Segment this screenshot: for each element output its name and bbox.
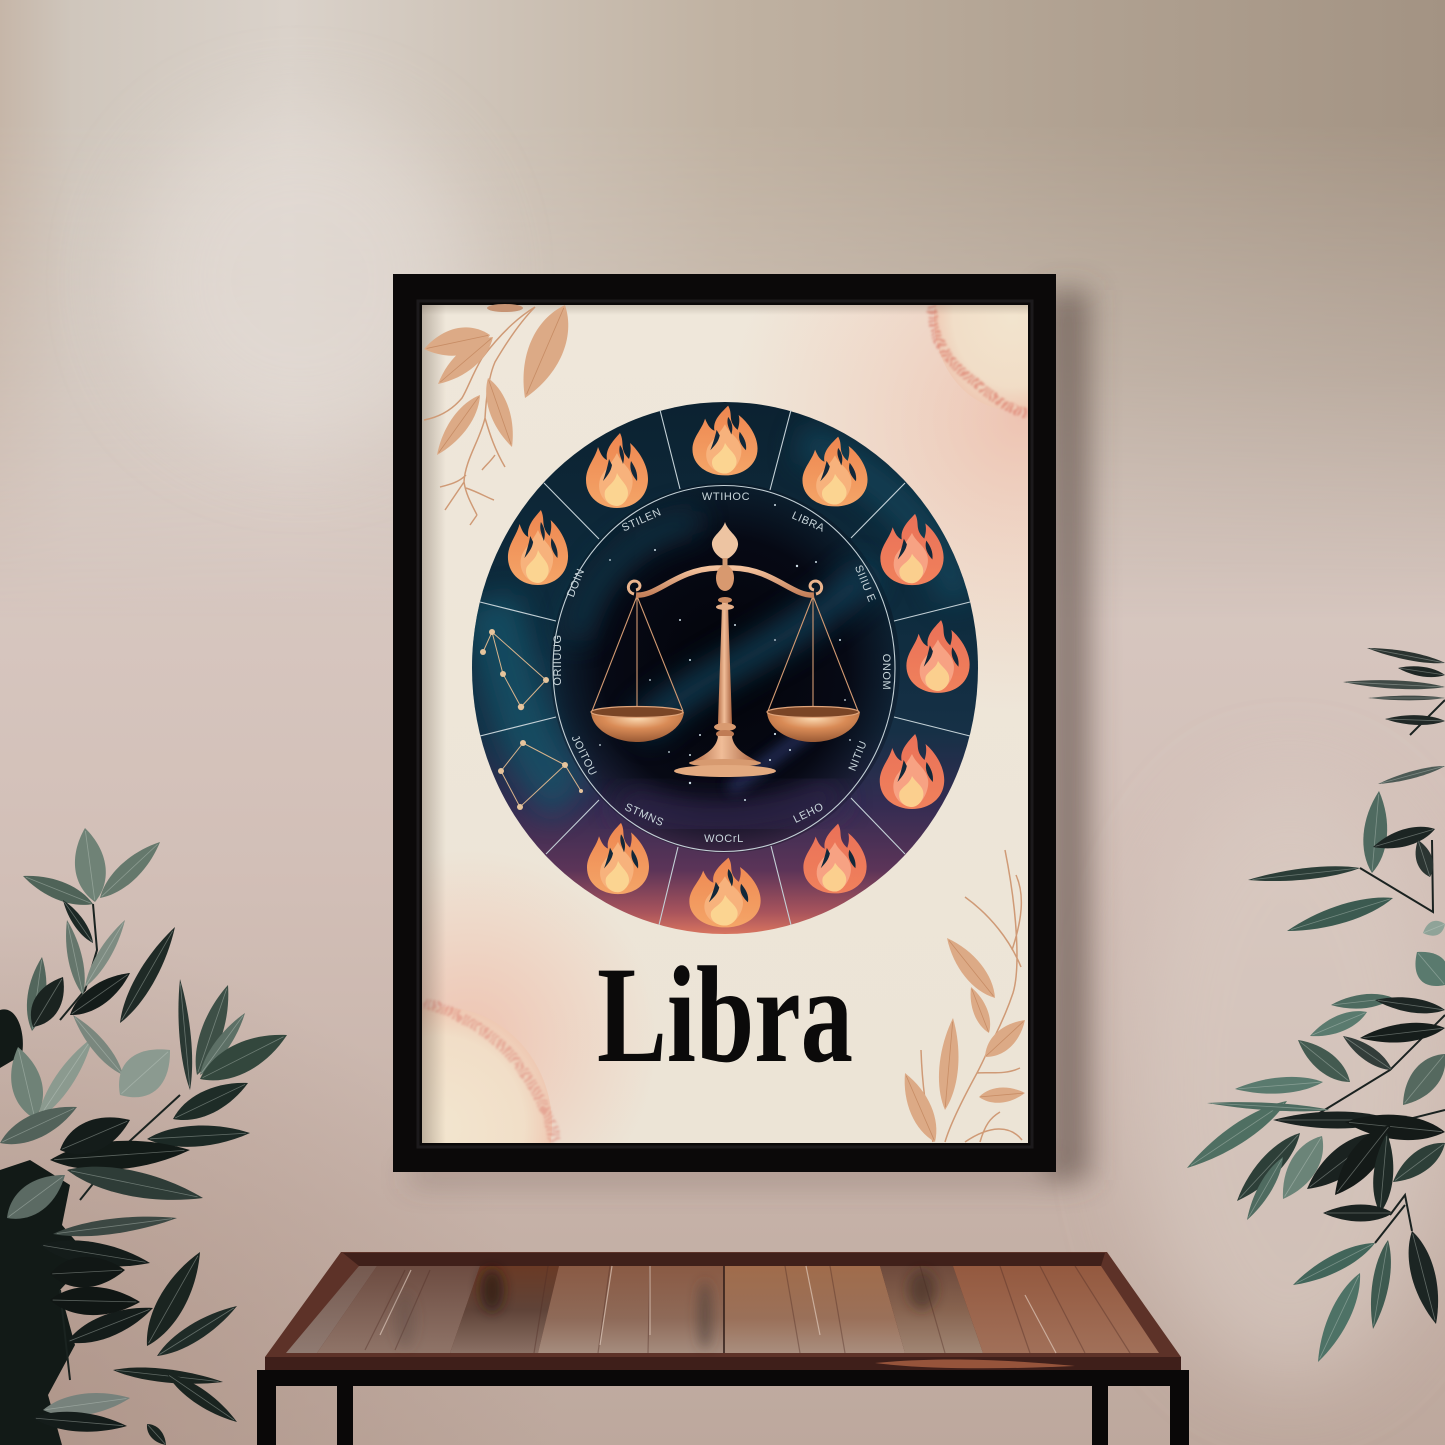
finial [712, 522, 738, 560]
base [674, 736, 776, 777]
ring labels: LEHO [792, 801, 826, 826]
constellation: upper [480, 629, 549, 710]
ring labels: SIIIU E [852, 564, 878, 604]
ring labels: STMNS [623, 801, 666, 829]
pan strings [592, 596, 858, 712]
flames [508, 406, 970, 927]
ring labels: WOCrL [704, 833, 744, 845]
ring labels: DOIN [565, 567, 587, 599]
constellation: lower [498, 740, 583, 810]
ring labels: ONOM [880, 654, 892, 690]
libra scales [591, 522, 860, 777]
star field [599, 504, 851, 801]
leaves [1182, 644, 1445, 1366]
frame shadow [410, 290, 1090, 1182]
poster paper [422, 305, 1028, 1143]
wood planks [286, 1266, 1159, 1353]
ring labels: JOITOU [569, 733, 599, 778]
dark foliage mass [0, 1009, 90, 1445]
stems [60, 904, 180, 1380]
ring labels: LIBRA [790, 510, 827, 535]
framed poster [328, 226, 1090, 1243]
metal frame and legs [257, 1370, 1189, 1445]
leaves [0, 826, 294, 1445]
ring labels: STILEN [620, 506, 663, 534]
plant: right [1182, 644, 1445, 1366]
scale beam [628, 565, 822, 595]
table front edge highlight [875, 1360, 1075, 1368]
plank grain [365, 1266, 1130, 1353]
right pan [767, 706, 860, 742]
frame [393, 274, 1056, 1172]
wheel background [472, 402, 978, 934]
botanical: bottom right [895, 850, 1032, 1146]
wood dark knots [395, 1268, 936, 1349]
post [714, 558, 736, 738]
title: Libra [597, 938, 853, 1091]
wheel rings and sector dividers [480, 410, 970, 925]
ring labels: WTIHOC [702, 491, 750, 503]
stems [1300, 700, 1445, 1243]
table top tray [265, 1252, 1181, 1371]
ring labels [552, 491, 892, 845]
plant: left [0, 826, 294, 1445]
ring labels: ORIIUUG [552, 634, 564, 686]
left pan [591, 706, 684, 742]
zodiac wheel [472, 402, 978, 934]
ring labels: NITIU [847, 739, 870, 773]
botanical: top left [421, 298, 580, 525]
wooden table [257, 1252, 1189, 1445]
